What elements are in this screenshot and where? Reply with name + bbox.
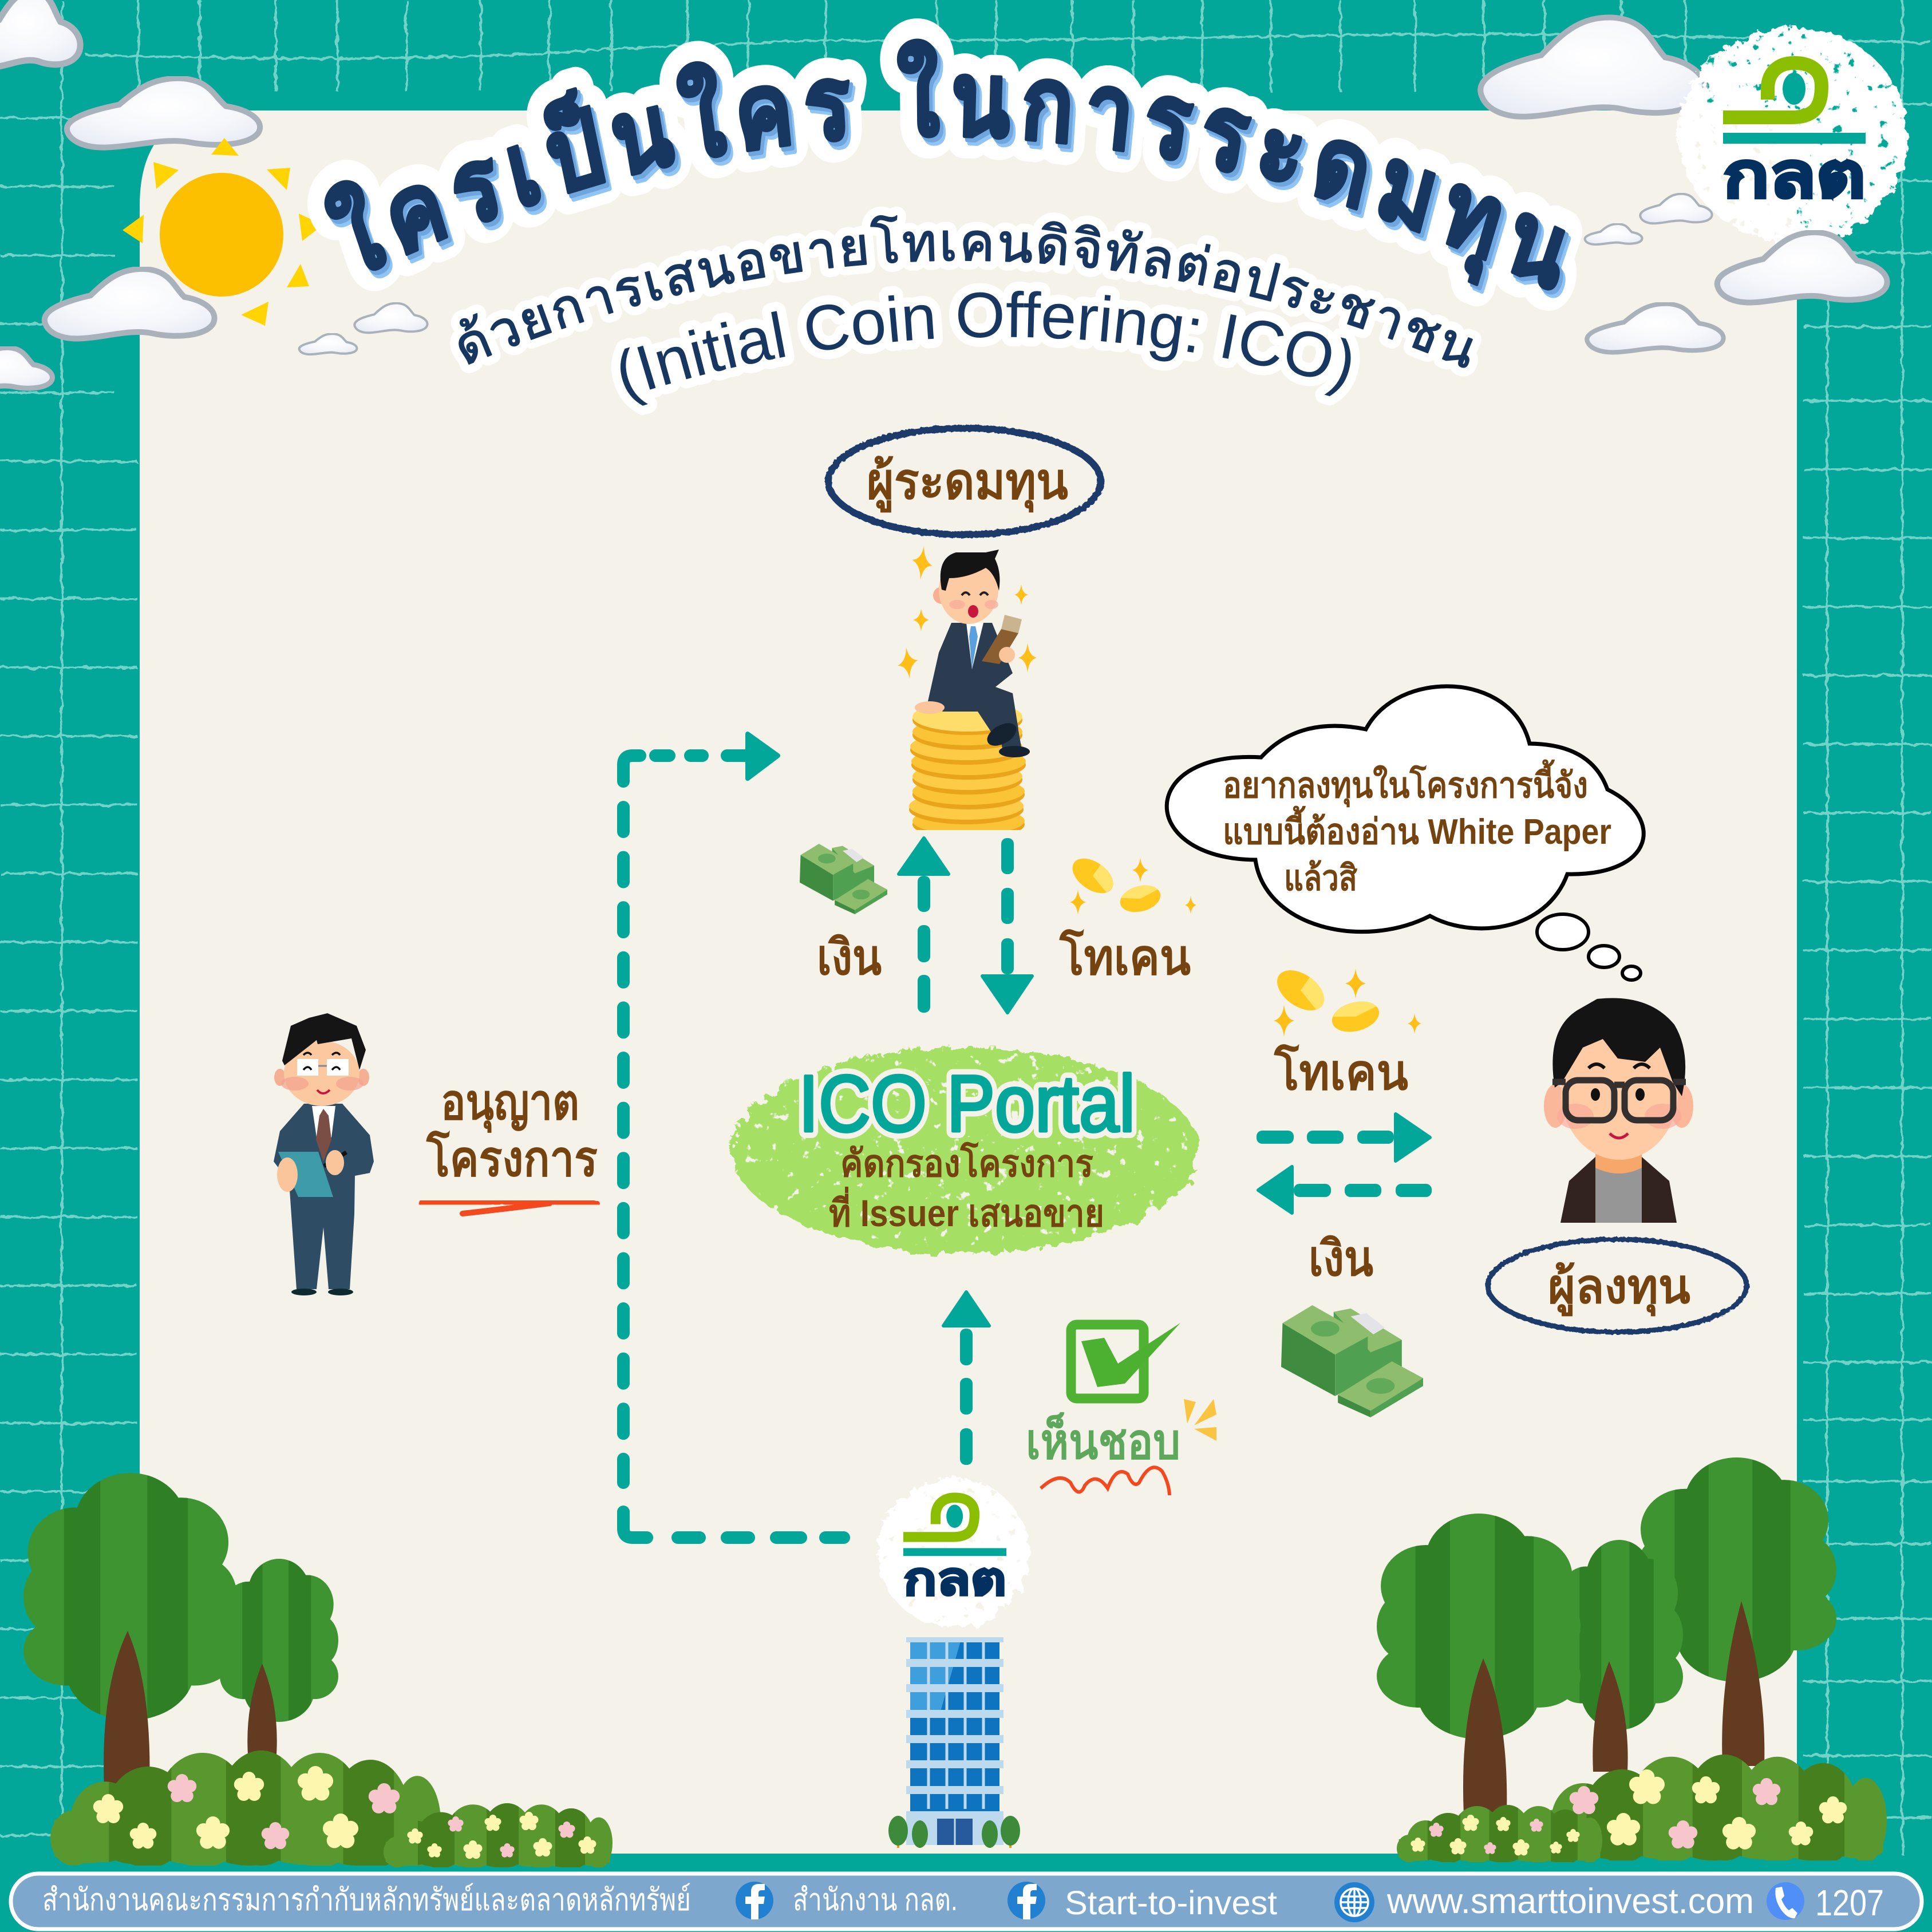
illustration: regulator officer [274, 1013, 374, 1295]
thought bubble: อยากลงทุนในโครงการนี้จัง [1223, 759, 1588, 807]
label: approve project [424, 1075, 598, 1214]
icon: large money stack [1281, 1305, 1423, 1417]
thought bubble [1167, 686, 1643, 980]
icon: phone [1767, 1882, 1804, 1920]
title with white sticker outline: ใครเป็นใคร ในการระดมทุน [307, 18, 1582, 311]
clouds: top-right group [1480, 18, 1724, 352]
ICO Portal chalk blob: ICO Portal [799, 1058, 1135, 1148]
cream main panel [140, 110, 1797, 1854]
label: fundraiser: ผู้ระดมทุน [867, 453, 1068, 513]
thought bubble: แบบนี้ต้องอ่าน White Paper [1223, 805, 1611, 852]
seated man [928, 623, 1018, 733]
footer: website: www.smarttoinvest.com [1386, 1882, 1754, 1921]
icon: facebook 1 [736, 1882, 773, 1919]
label: approve project: โครงการ [426, 1130, 598, 1187]
ICO Portal chalk blob [732, 1048, 1199, 1254]
label: approve: เห็นชอบ [1026, 1412, 1180, 1469]
illustration: investor [1544, 998, 1693, 1223]
logo: SEC lower: กลต [903, 1553, 1006, 1604]
label: approve project: อนุญาต [441, 1075, 579, 1133]
subtitle: english line: (Initial Coin Offering: ICO) [611, 282, 1360, 415]
icon: globe [1334, 1882, 1374, 1922]
title with white sticker outline: ใครเป็นใคร ในการระดมทุน [324, 39, 1565, 291]
footer: organisation name: สำนักงานคณะกรรมการกำกับหลักทรัพย์และตลาดหลักทรัพย์ [42, 1883, 691, 1917]
illustration: SEC building [888, 1637, 1020, 1848]
clouds: top-left group [0, 0, 428, 390]
logo: SEC top right: กลต [1723, 140, 1866, 211]
label: approve [1026, 1399, 1216, 1495]
cloud overlapping logo [1717, 232, 1887, 302]
subtitle: offering line: ด้วยการเสนอขายโทเคนดิจิทัลต่อประชาชน [450, 207, 1481, 377]
dashed arrow: regulator approves project to fundraiser [623, 734, 844, 1538]
footer: start-to-invest: Start-to-invest [1065, 1884, 1277, 1922]
icon: sun [123, 138, 323, 326]
label: investor [1488, 1239, 1747, 1332]
thought bubble: แล้วสิ [1284, 859, 1357, 898]
coin stack [909, 709, 1026, 830]
label: money right: เงิน [1309, 1231, 1373, 1286]
label: money: เงิน [817, 930, 882, 985]
bushes: left [50, 1751, 613, 1867]
ICO Portal chalk blob: ที่ Issuer เสนอขาย [829, 1186, 1104, 1234]
icon: facebook 2 [1008, 1882, 1045, 1919]
arrow: token down to portal [982, 838, 1032, 1013]
icon: approval check [1071, 1323, 1180, 1398]
arrow: regulator up to portal [943, 1292, 989, 1465]
label: fundraiser [828, 428, 1101, 535]
title with white sticker outline: ใครเป็นใคร ในการระดมทุน [329, 45, 1568, 294]
ICO Portal chalk blob: คัดกรองโครงการ [840, 1141, 1093, 1184]
trees: left [23, 1473, 338, 1789]
trees: right [1377, 1457, 1836, 1815]
title with white sticker outline: ใครเป็นใคร ในการระดมทุน [331, 53, 1571, 298]
label: investor: ผู้ลงทุน [1548, 1259, 1690, 1317]
logo: SEC top right [1678, 27, 1907, 242]
logo: SEC lower [878, 1478, 1029, 1627]
icon: small token coins [1066, 851, 1196, 916]
sparkles [896, 543, 1037, 681]
footer bar [11, 1874, 1922, 1929]
footer: hotline: 1207 [1815, 1882, 1884, 1923]
arrow: money up to fundraiser [899, 838, 949, 1013]
bushes: right [1397, 1755, 1887, 1862]
arrow: token to investor [1257, 1114, 1430, 1161]
icon: small money stack [800, 844, 887, 914]
illustration: fundraiser sitting on coins [896, 543, 1037, 839]
footer: facebook name: สำนักงาน กลต. [793, 1883, 958, 1917]
subtitle: english line: (Initial Coin Offering: ICO) [621, 291, 1351, 406]
ICO Portal chalk blob: ICO Portal [799, 1058, 1135, 1148]
arrow: money to portal [1258, 1167, 1432, 1213]
subtitle: offering line: ด้วยการเสนอขายโทเคนดิจิทัลต่อประชาชน [459, 215, 1473, 368]
label: token right: โทเคน [1274, 1044, 1408, 1100]
icon: large token coins [1270, 962, 1421, 1037]
label: token: โทเคน [1059, 929, 1191, 985]
